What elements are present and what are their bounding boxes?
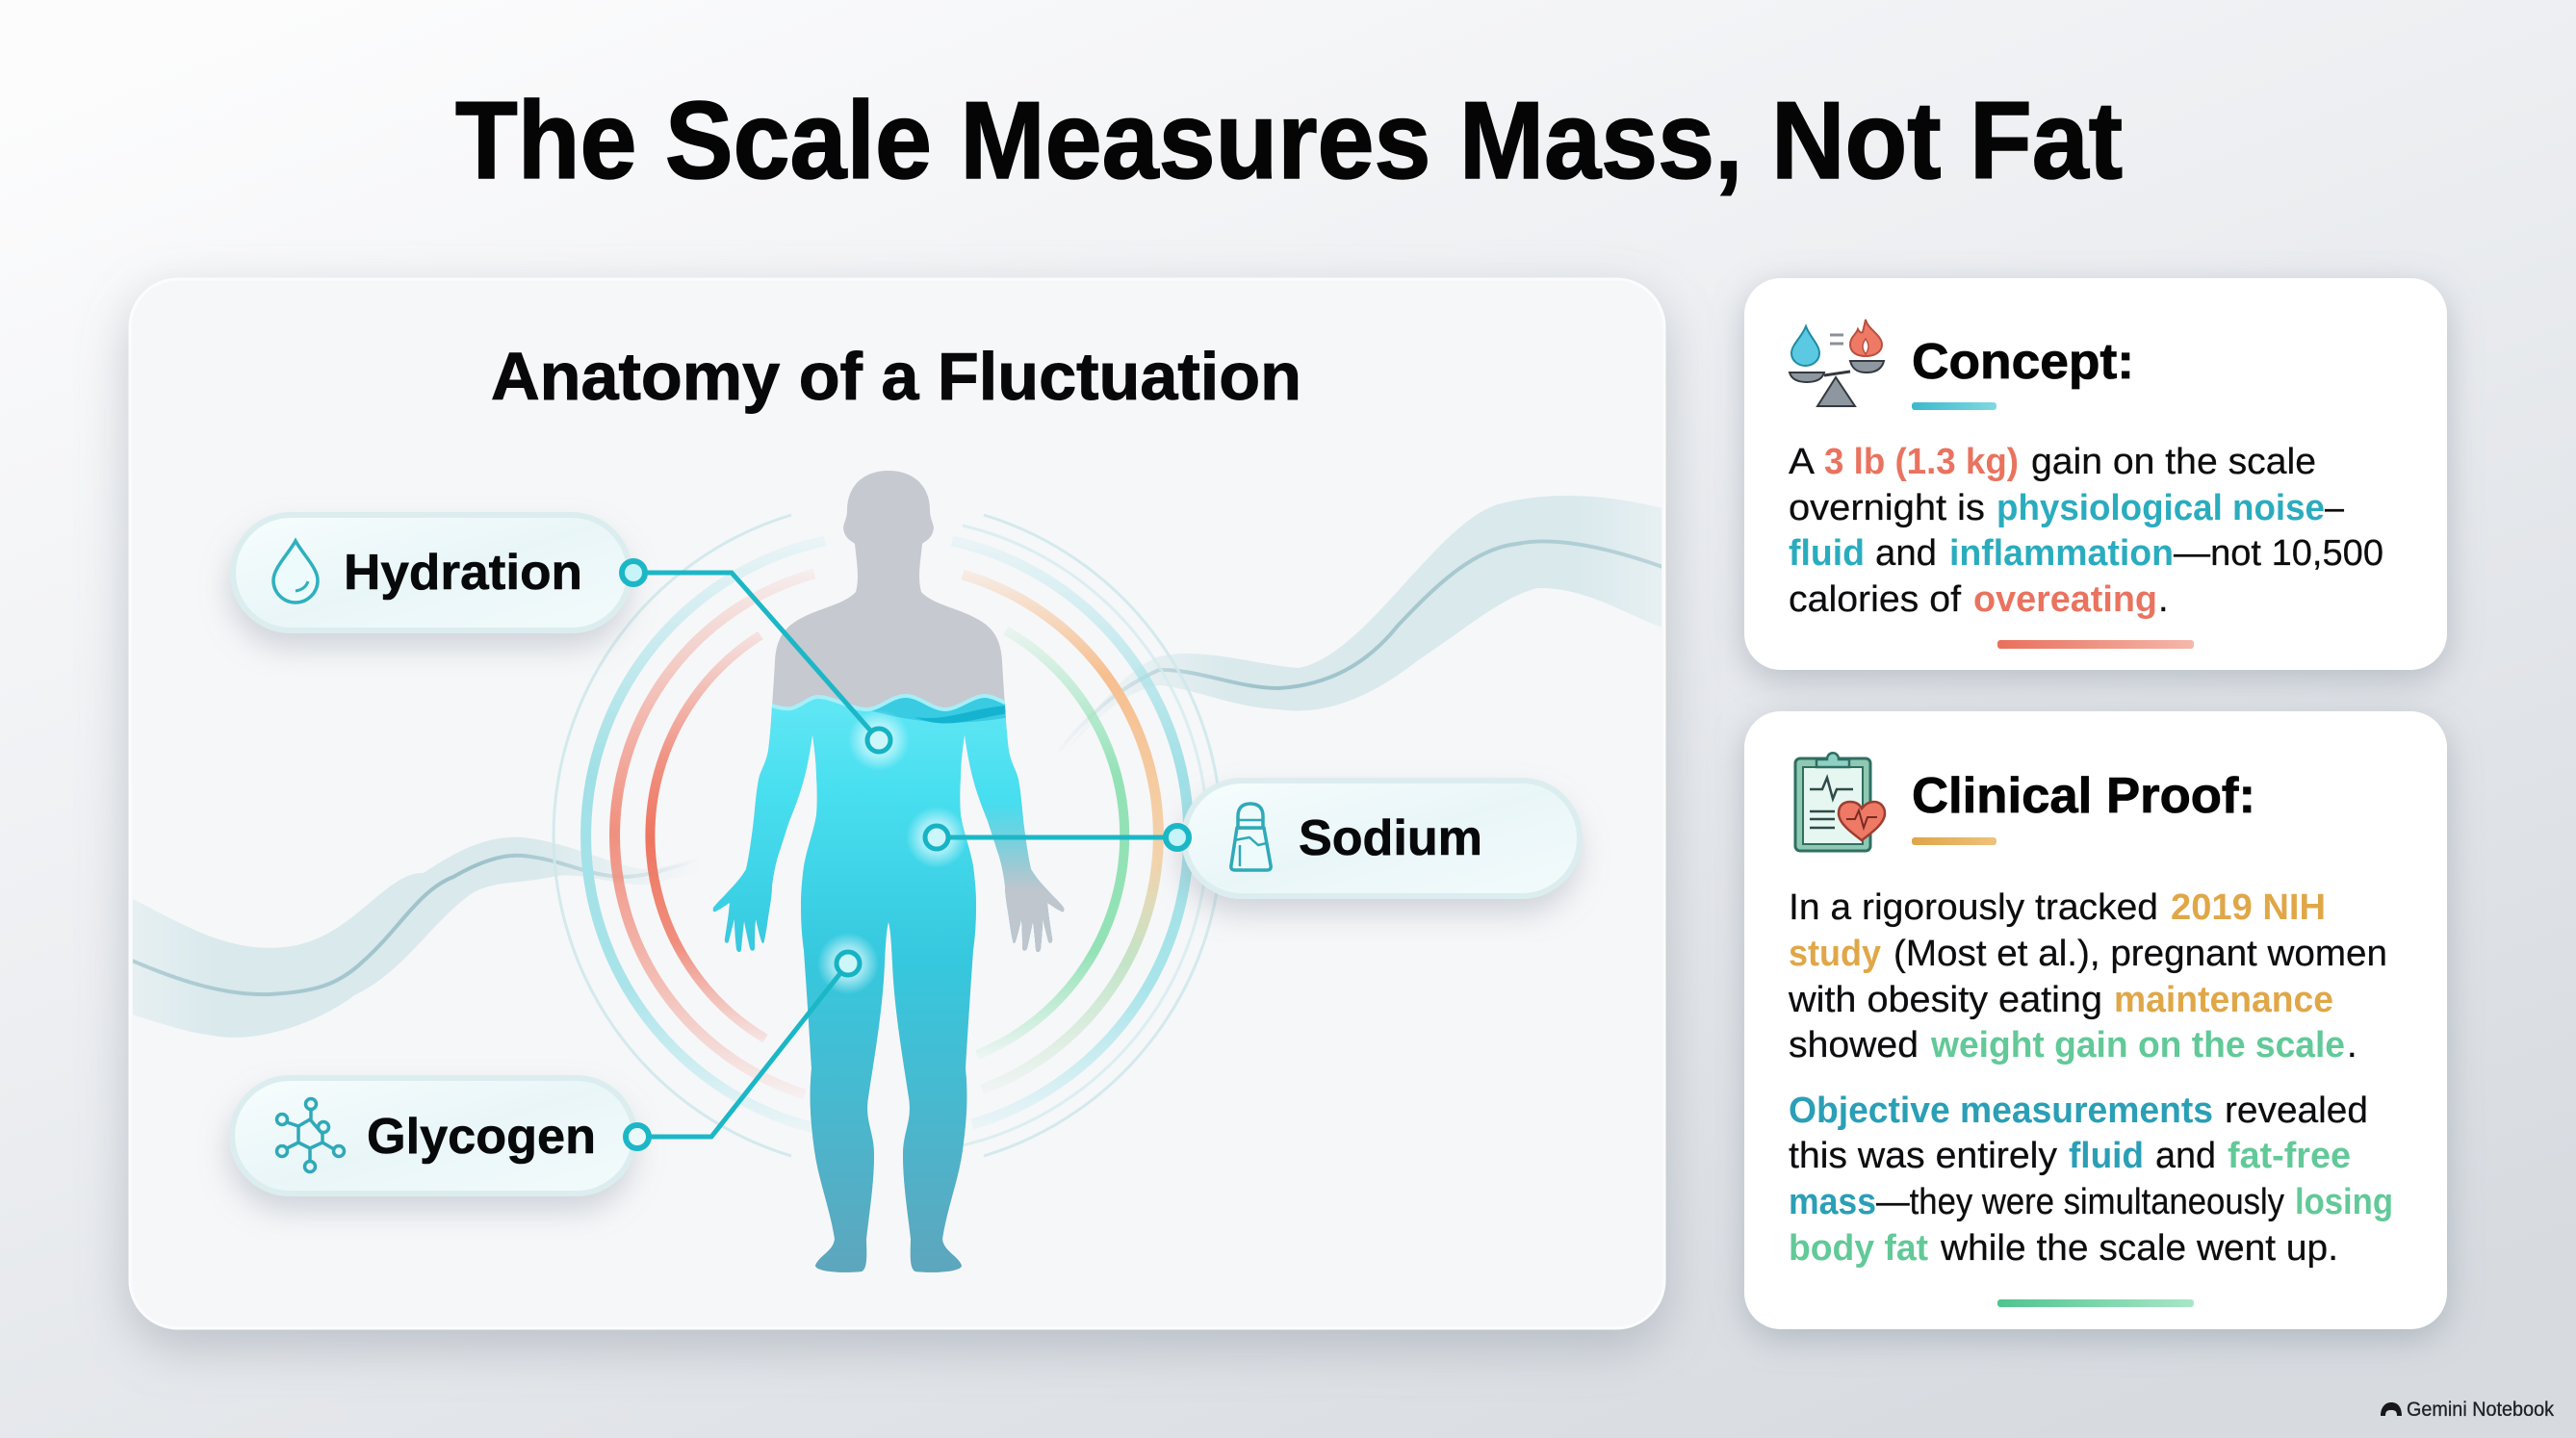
accent bar xyxy=(1997,640,2194,649)
watermark: gemini notebook: Gemini Notebook xyxy=(2407,1399,2554,1421)
text: concept body: and xyxy=(1875,533,1937,574)
underline xyxy=(1912,837,1996,845)
text: concept body: —not 10,500 xyxy=(2174,533,2383,574)
title: The Scale Measures Mass, Not Fat xyxy=(455,80,2123,202)
text: clinical proof paragraph two: body fat xyxy=(1789,1228,1928,1269)
text: clinical proof paragraph two xyxy=(1789,1091,2393,1269)
text: concept body: inflammation xyxy=(1949,533,2174,574)
text: concept body: fluid xyxy=(1789,533,1865,574)
text: clinical proof paragraph one: with obesity eating xyxy=(1788,980,2102,1020)
panel: anatomy of a fluctuation xyxy=(125,279,1670,1328)
label: hydration: Hydration xyxy=(344,545,582,601)
text: clinical proof paragraph two: losing xyxy=(2295,1182,2393,1222)
text: clinical proof paragraph one: . xyxy=(2347,1025,2357,1066)
underline xyxy=(1912,402,1996,410)
connector: sodium xyxy=(906,807,1189,868)
text: concept body: A xyxy=(1789,442,1816,482)
label: glycogen: Glycogen xyxy=(367,1109,596,1165)
wave: right fluctuation band xyxy=(1059,496,1670,760)
icon: salt shaker xyxy=(1231,804,1271,870)
icon: clipboard with heart xyxy=(1795,753,1885,851)
pill: glycogen xyxy=(232,1078,634,1194)
text: clinical proof paragraph two: this was entirely xyxy=(1789,1136,2057,1176)
text: clinical proof paragraph one: In a rigorously tracked xyxy=(1789,887,2158,928)
text: clinical proof paragraph two: revealed xyxy=(2225,1091,2368,1131)
pill: hydration xyxy=(233,515,630,630)
pill: sodium xyxy=(1184,781,1580,896)
connector: hydration xyxy=(622,561,910,771)
accent bar xyxy=(1997,1299,2194,1307)
panel: concept xyxy=(1744,278,2447,670)
text: concept body: 3 lb (1.3 kg) xyxy=(1824,442,2019,482)
text: concept body: . xyxy=(2158,579,2169,620)
heading: anatomy of a fluctuation: Anatomy of a Fluctuation xyxy=(491,339,1301,414)
text: clinical proof paragraph one: showed xyxy=(1789,1025,1919,1066)
text: clinical proof paragraph one: maintenance xyxy=(2114,980,2333,1020)
text: concept body xyxy=(1789,442,2383,620)
icon: water drop xyxy=(273,541,318,603)
heading: clinical proof: Clinical Proof: xyxy=(1912,768,2255,824)
text: clinical proof paragraph two: fat-free xyxy=(2228,1136,2351,1176)
figure: human body silhouette with water level xyxy=(712,471,1065,1272)
text: concept body: gain on the scale xyxy=(2031,442,2316,482)
icon: glycogen molecule xyxy=(277,1099,345,1172)
text: clinical proof paragraph two: mass xyxy=(1789,1182,1876,1222)
text: concept body: overnight is xyxy=(1789,488,1985,528)
heading: concept: Concept: xyxy=(1912,334,2134,390)
panel: clinical proof xyxy=(1744,711,2447,1329)
text: clinical proof paragraph one: study xyxy=(1789,934,1881,974)
text: clinical proof paragraph two: and xyxy=(2155,1136,2216,1176)
text: clinical proof paragraph one: weight gain on the scale xyxy=(1930,1025,2345,1066)
label: sodium: Sodium xyxy=(1299,810,1482,866)
text: clinical proof paragraph two: fluid xyxy=(2069,1136,2144,1176)
text: concept body: — xyxy=(2325,488,2344,528)
text: clinical proof paragraph two: while the scale went up. xyxy=(1940,1228,2338,1269)
text: concept body: calories of xyxy=(1789,579,1961,620)
connector: glycogen xyxy=(626,933,879,1148)
text: clinical proof paragraph two: Objective measurements xyxy=(1789,1091,2213,1131)
wave: left fluctuation band xyxy=(125,837,703,1038)
text: clinical proof paragraph one: (Most et al.), pregnant women xyxy=(1893,934,2387,974)
text: clinical proof paragraph one xyxy=(1788,887,2387,1066)
text: clinical proof paragraph two: —they were simultaneously xyxy=(1876,1182,2284,1222)
text: clinical proof paragraph one: 2019 NIH xyxy=(2171,887,2326,928)
text: concept body: overeating xyxy=(1973,579,2157,620)
chart: concentric fluctuation rings xyxy=(554,515,1222,1156)
text: concept body: physiological noise xyxy=(1996,488,2325,528)
icon: balance scale with drop and flame xyxy=(1790,320,1884,406)
